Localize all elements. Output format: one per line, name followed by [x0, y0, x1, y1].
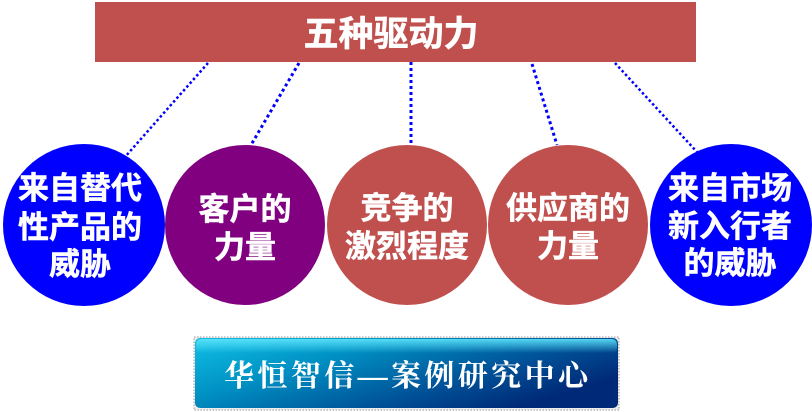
circle: threat of new entrants: 的威胁 — [684, 246, 776, 281]
circle: supplier power: 力量 — [537, 229, 599, 264]
circle: supplier power: 供应商的 — [506, 191, 630, 226]
dotted connector: banner to customer power — [251, 63, 299, 145]
dotted connector: banner to competition — [410, 62, 412, 143]
circle: intensity of competition: 激烈程度 — [345, 229, 469, 264]
circle: threat of substitutes: 威胁 — [49, 247, 111, 282]
circle: customer power: 力量 — [214, 230, 276, 265]
footer button: case study center — [194, 337, 619, 410]
dotted connector: banner to new entrants — [615, 63, 697, 152]
circle: supplier power — [488, 145, 648, 305]
title banner: 五种驱动力 — [303, 15, 479, 54]
dotted connector: banner to substitutes threat — [125, 63, 208, 157]
circle: threat of substitutes: 性产品的 — [18, 210, 142, 245]
dotted connector: banner to supplier power — [532, 64, 557, 145]
circle: intensity of competition: 竞争的 — [360, 191, 454, 226]
circle: customer power: 客户的 — [198, 192, 292, 227]
footer button: case study center: 华恒智信—案例研究中心 — [224, 359, 592, 393]
circle: threat of substitutes — [3, 144, 165, 306]
circle: threat of new entrants: 新入行者 — [668, 209, 792, 244]
circle: customer power — [165, 145, 325, 305]
circle: threat of new entrants — [650, 144, 812, 306]
circle: intensity of competition — [327, 145, 487, 305]
title banner — [95, 2, 696, 62]
circle: threat of new entrants: 来自市场 — [668, 171, 792, 206]
circle: threat of substitutes: 来自替代 — [18, 171, 142, 206]
